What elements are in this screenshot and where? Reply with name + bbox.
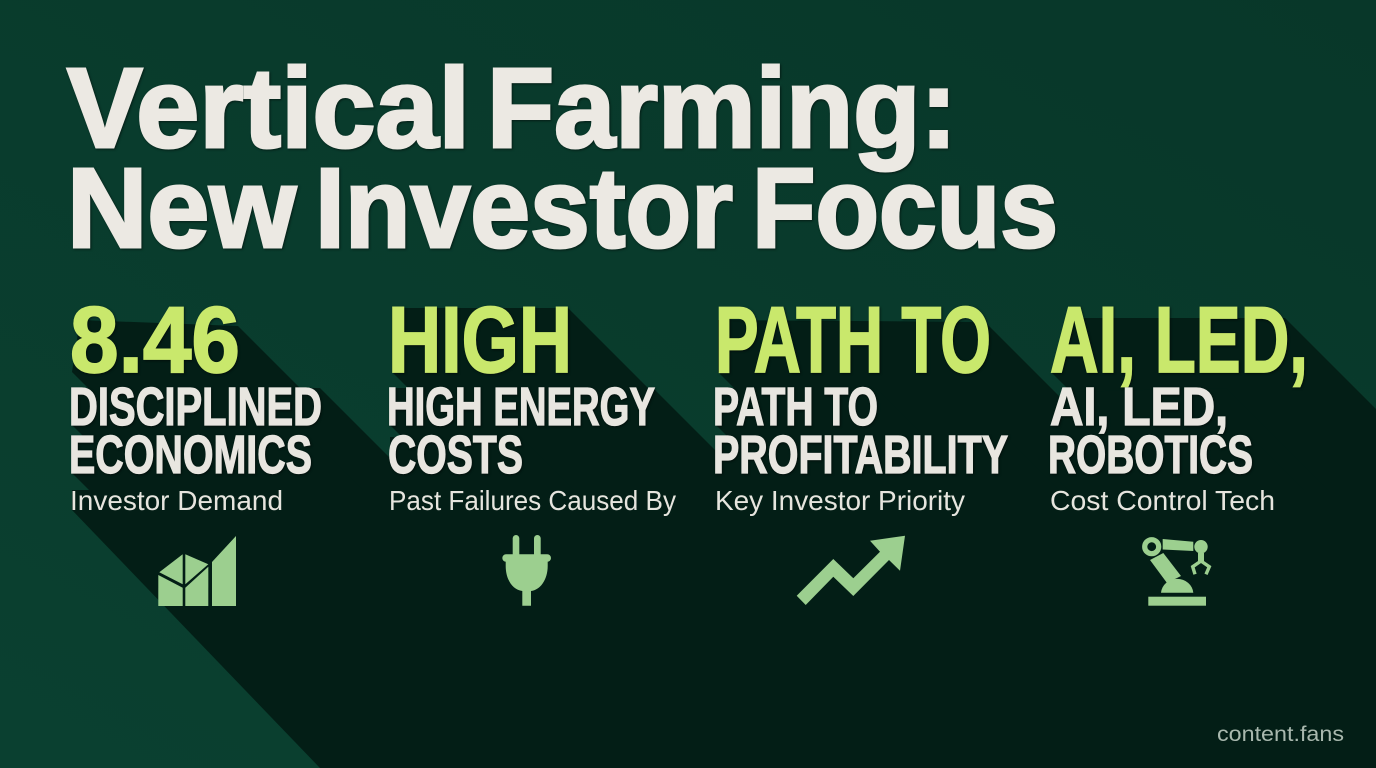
heading: ROBOTICS xyxy=(1048,425,1253,485)
caption: Key Investor Priority xyxy=(715,485,965,516)
caption: Cost Control Tech xyxy=(1050,485,1275,516)
title: Focus xyxy=(752,145,1058,271)
heading: AI, LED, xyxy=(1050,377,1228,437)
icon: plug xyxy=(502,535,551,606)
big figure: 8.46 xyxy=(70,287,240,392)
heading: COSTS xyxy=(388,425,523,485)
heading: PATH TO xyxy=(713,377,878,437)
column: AI, LED, robotics xyxy=(1048,287,1308,606)
column: disciplined economics xyxy=(69,287,322,606)
title xyxy=(67,45,1058,271)
column: high energy costs xyxy=(387,287,676,606)
heading xyxy=(69,377,322,485)
heading: ECONOMICS xyxy=(69,425,312,485)
heading: DISCIPLINED xyxy=(69,377,322,437)
title: Farming: xyxy=(487,45,957,171)
caption: Investor Demand xyxy=(70,485,283,516)
heading: HIGH ENERGY xyxy=(387,377,655,437)
heading: PROFITABILITY xyxy=(713,425,1008,485)
icon: rising arrow xyxy=(797,536,905,605)
heading xyxy=(387,377,655,485)
heading xyxy=(713,377,1008,485)
icon: building bar chart xyxy=(158,536,236,606)
heading xyxy=(1048,377,1253,485)
title: Vertical xyxy=(67,45,470,171)
brand watermark: content.fans xyxy=(1217,722,1344,746)
icon: robot arm xyxy=(1145,539,1209,606)
big word: PATH TO xyxy=(715,287,991,392)
big word: HIGH xyxy=(388,287,572,392)
title: New xyxy=(67,145,297,271)
title: Investor xyxy=(315,145,733,271)
long diagonal shadow xyxy=(72,308,1376,768)
caption: Past Failures Caused By xyxy=(389,485,676,516)
column: path to profitability xyxy=(713,287,1008,605)
